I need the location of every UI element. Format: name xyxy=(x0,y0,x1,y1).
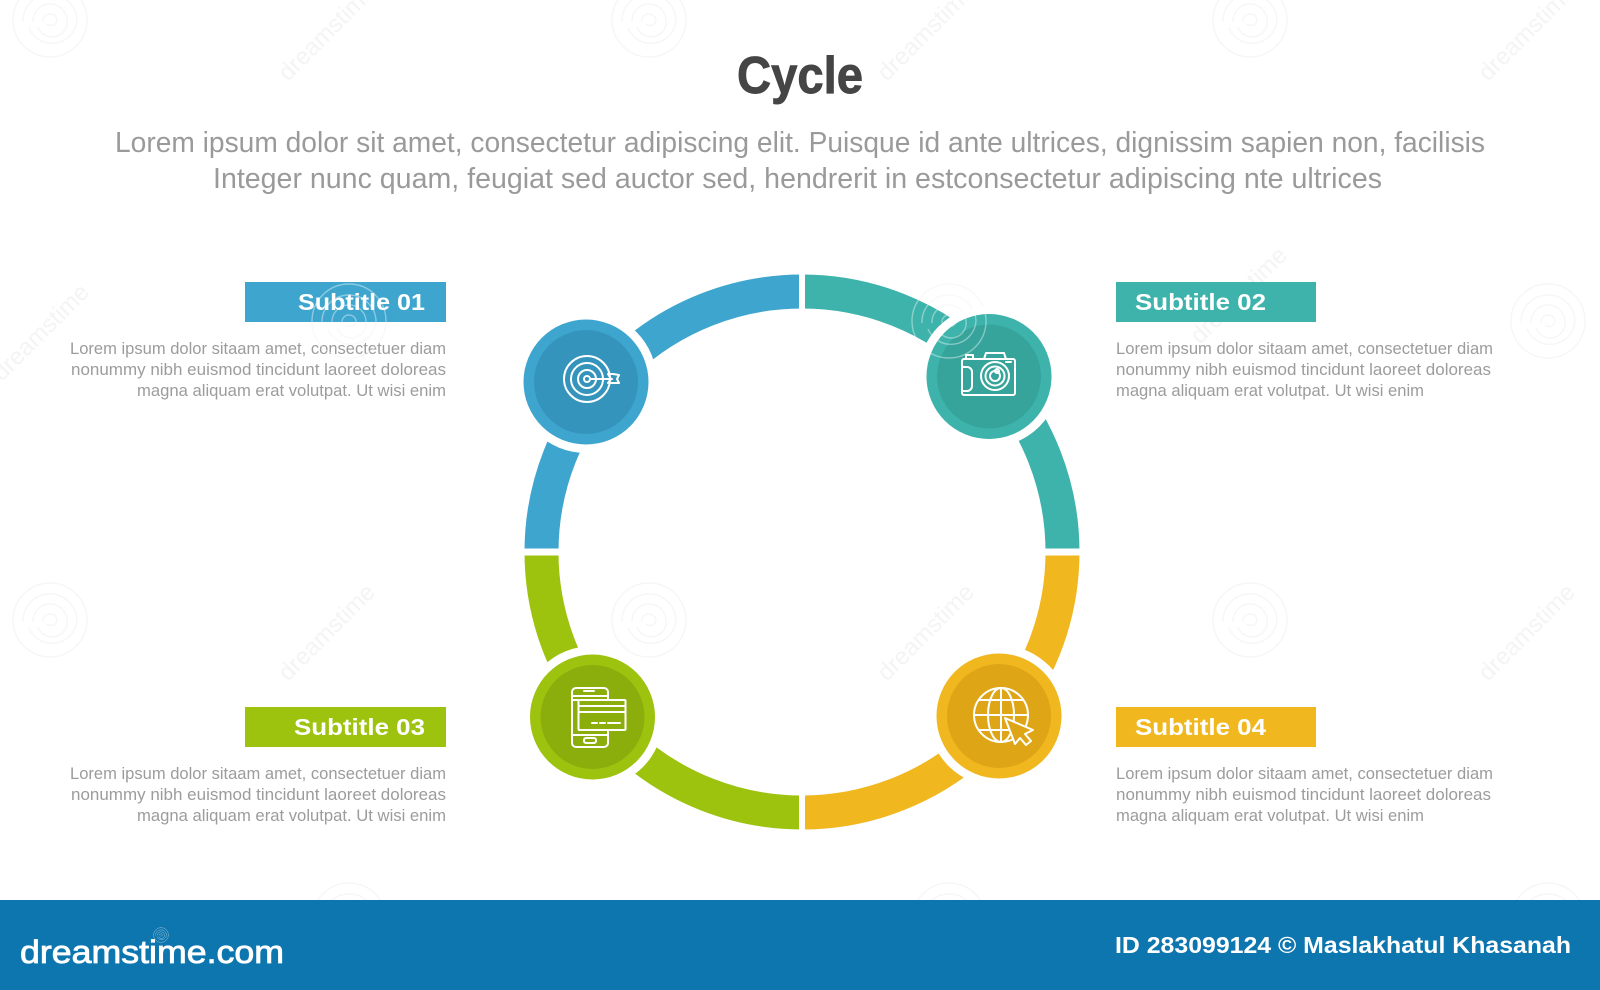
block 01 xyxy=(70,282,446,400)
description 03: Lorem ipsum dolor sitaam amet, consectetuer diam xyxy=(70,765,446,783)
watermark background: dreamstime xyxy=(1473,579,1581,686)
icon: mobile payment card xyxy=(572,688,626,747)
subtitle 01 xyxy=(245,282,446,322)
subtitle 02: Subtitle 02 xyxy=(1135,289,1266,315)
icon: camera xyxy=(962,353,1015,395)
description 02: magna aliquam erat volutpat. Ut wisi enim xyxy=(1116,382,1424,400)
description 04: magna aliquam erat volutpat. Ut wisi enim xyxy=(1116,807,1424,825)
node 04: globe xyxy=(928,645,1070,787)
subtitle 04: Subtitle 04 xyxy=(1135,714,1266,740)
description 01: Lorem ipsum dolor sitaam amet, consectetuer diam xyxy=(70,340,446,358)
description 03: nonummy nibh euismod tincidunt laoreet doloreas xyxy=(71,786,446,804)
block 02 xyxy=(1116,282,1493,400)
subtitle 01: Subtitle 01 xyxy=(298,289,425,315)
subtitle 02 xyxy=(1116,282,1316,322)
subtitle 03 xyxy=(245,707,446,747)
icon: globe with cursor xyxy=(974,688,1033,745)
description 03 xyxy=(70,765,446,825)
footer logo: dreamstime.com xyxy=(20,934,284,970)
description 04 xyxy=(1116,765,1493,825)
intro text: Lorem ipsum dolor sit amet, consectetur adipiscing elit. Puisque id ante ultrices, dignissim sapien non, facilisis xyxy=(115,127,1485,159)
description 01: magna aliquam erat volutpat. Ut wisi enim xyxy=(137,382,446,400)
footer credit: ID 283099124 © Maslakhatul Khasanah xyxy=(1115,932,1571,958)
cycle ring xyxy=(542,292,1062,812)
block 03 xyxy=(70,707,446,825)
node 03: mobile card xyxy=(522,646,664,788)
ring segment: blue xyxy=(542,292,802,552)
intro text xyxy=(115,127,1485,195)
subtitle 04 xyxy=(1116,707,1316,747)
description 02 xyxy=(1116,340,1493,400)
description 04: Lorem ipsum dolor sitaam amet, consectetuer diam xyxy=(1116,765,1493,783)
node 02: camera xyxy=(918,306,1060,448)
node 01: target xyxy=(515,311,657,453)
icon: target xyxy=(564,356,619,402)
watermark overlay xyxy=(312,284,986,358)
description 02: Lorem ipsum dolor sitaam amet, consectetuer diam xyxy=(1116,340,1493,358)
description 01: nonummy nibh euismod tincidunt laoreet doloreas xyxy=(71,361,446,379)
block 04 xyxy=(1116,707,1493,825)
description 02: nonummy nibh euismod tincidunt laoreet doloreas xyxy=(1116,361,1491,379)
subtitle 03: Subtitle 03 xyxy=(294,714,425,740)
title: Cycle xyxy=(737,47,863,105)
description 01 xyxy=(70,340,446,400)
description 03: magna aliquam erat volutpat. Ut wisi enim xyxy=(137,807,446,825)
ring segment: green xyxy=(542,552,802,812)
watermark background: dreamstime xyxy=(872,579,980,686)
footer bar xyxy=(0,900,1600,990)
intro text: Integer nunc quam, feugiat sed auctor sed, hendrerit in estconsectetur adipiscing nte ultrices xyxy=(213,163,1382,195)
ring segment: teal xyxy=(802,292,1062,552)
ring segment: yellow xyxy=(802,552,1062,812)
description 04: nonummy nibh euismod tincidunt laoreet doloreas xyxy=(1116,786,1491,804)
watermark background: dreamstime xyxy=(1185,242,1293,349)
watermark background: dreamstime xyxy=(273,579,381,686)
